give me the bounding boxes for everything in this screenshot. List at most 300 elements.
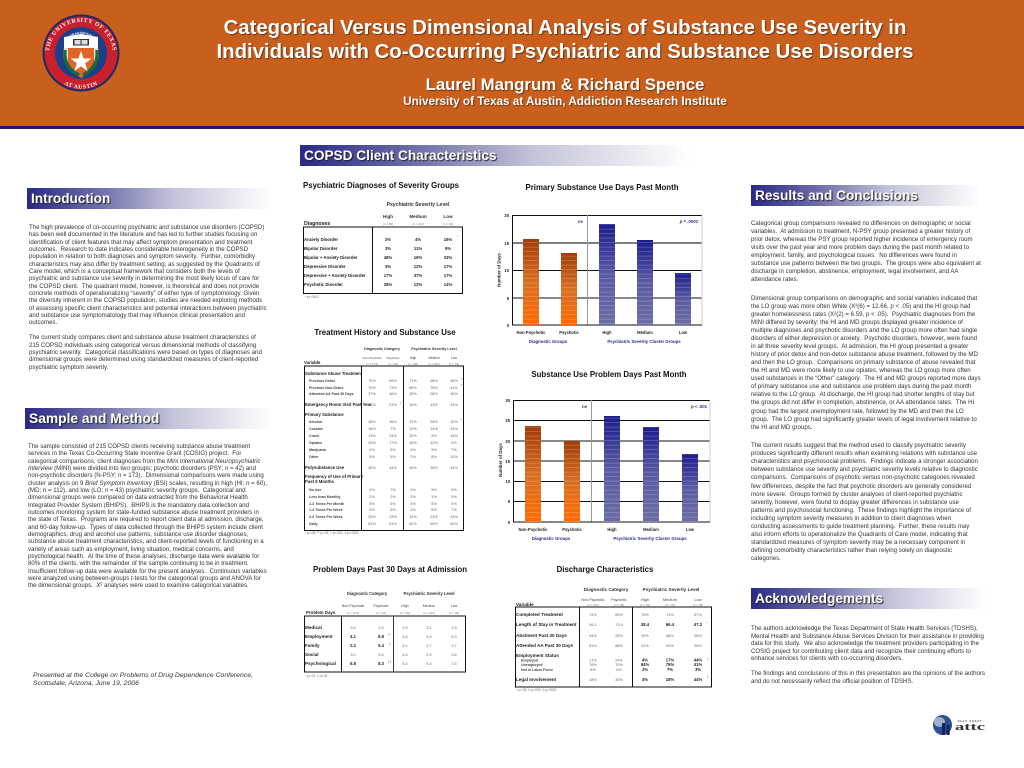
table: discharge characteristics: 47.2 xyxy=(694,622,703,627)
table: discharge characteristics: Not in Labor Force xyxy=(521,668,553,672)
bar chart: primary substance use days past month: Psychiatric Severity Cluster Groups xyxy=(607,339,681,344)
table: problem days past 30 days at admission: High xyxy=(401,604,409,608)
text: acknowledgement paragraphs: enhance services for clients with co-occurring disorders. xyxy=(751,655,903,662)
table: discharge characteristics: (n = 117) xyxy=(587,603,599,607)
axis labels: Non-Psychotic xyxy=(516,330,546,335)
table: treatment history and substance use: 45% xyxy=(409,466,417,470)
bar chart: primary substance use days past month xyxy=(496,183,702,344)
table: treatment history and substance use: High xyxy=(410,356,417,360)
table: treatment history and substance use: 42% xyxy=(450,522,458,526)
axis labels: Low xyxy=(679,330,688,335)
text: acknowledgement paragraphs: The authors acknowledge the Texas Department of State Health Services (TDSHS), xyxy=(751,625,978,632)
text: results paragraphs: few differences, despite the fact that psychotic disorders are generally considered xyxy=(751,482,971,490)
table: treatment history and substance use: 14% xyxy=(430,427,438,431)
table: discharge characteristics: 95% xyxy=(694,634,702,638)
table: discharge characteristics: 17% xyxy=(589,658,597,662)
table: treatment history and substance use: 23% xyxy=(430,515,438,519)
text: results paragraphs: disorders of either depression or anxiety. Psychotic disorders, however, were found xyxy=(751,335,977,342)
table: treatment history and substance use: 5% xyxy=(369,455,375,459)
text: results paragraphs: in all three severity level groups. At admission, the HI group presented a greater xyxy=(751,343,968,350)
chart title: Primary Substance Use Days Past Month xyxy=(525,183,679,192)
table: discharge characteristics: 38.4 xyxy=(641,622,650,627)
table: treatment history and substance use: † xyxy=(461,383,463,387)
table: discharge characteristics: 4% xyxy=(642,677,648,682)
table: psychiatric diagnoses of severity groups: 3% xyxy=(385,246,391,251)
text: results paragraphs: greater homelessness rates (X²(2) = 6.59, p < .05). Psychiatric diagnoses from the xyxy=(751,311,975,318)
table: problem days past 30 days at admission: Diagnostic Category xyxy=(347,591,388,596)
table: psychiatric diagnoses of severity groups: 37% xyxy=(414,273,422,278)
bar chart: primary substance use days past month: p = .0001 xyxy=(679,219,699,224)
table: treatment history and substance use: 2-6 Times Per Week xyxy=(309,515,343,519)
table: problem days past 30 days at admission: ** xyxy=(388,633,391,637)
table: discharge characteristics: 74% xyxy=(589,613,597,617)
table: discharge characteristics: 8% xyxy=(590,668,596,672)
table: discharge characteristics: Completed Treatment xyxy=(516,612,563,617)
table: psychiatric diagnoses of severity groups: 48% xyxy=(384,255,392,260)
table: problem days past 30 days at admission: 5.6 xyxy=(378,653,384,657)
table: discharge characteristics: 76% xyxy=(589,663,597,667)
table: treatment history and substance use: 36% xyxy=(389,420,397,424)
text: sample and method paragraph: categorical comparisons, client diagnoses from the Mini International Neuropsychiatric xyxy=(28,458,261,465)
table: discharge characteristics: Psychotic xyxy=(611,598,627,602)
axis labels: 5 xyxy=(507,296,510,301)
text: introduction paragraphs: the COPSD client. The quadrant model, however, is theoretical and does not provide xyxy=(29,283,259,290)
table: discharge characteristics: 7% xyxy=(667,667,673,672)
axis labels: 30 xyxy=(505,398,511,403)
table: treatment history and substance use: 13% xyxy=(368,434,376,438)
heading: Acknowledgements: Acknowledgements xyxy=(755,591,883,606)
table: problem days past 30 days at admission: (n = 43) xyxy=(449,611,459,615)
table: treatment history and substance use: 2% xyxy=(390,495,396,499)
text: introduction paragraphs: the diversity inherent in the COPSD population, studies are needed exploring methods xyxy=(29,297,262,304)
table: treatment history and substance use: 6% xyxy=(431,508,437,512)
text: introduction paragraphs: characteristics may also differ by treatment setting, as suggested by the Quadrants of xyxy=(29,261,260,268)
table: problem days past 30 days at admission: Psychological xyxy=(305,661,336,666)
table: treatment history and substance use: 5% xyxy=(369,502,375,506)
table: psychiatric diagnoses of severity groups: * xyxy=(457,235,459,239)
table: discharge characteristics: 18% xyxy=(666,677,674,682)
table: discharge characteristics: 88% xyxy=(666,634,674,638)
table: problem days past 30 days at admission xyxy=(304,565,467,678)
table: problem days past 30 days at admission: 4.1 xyxy=(350,634,357,639)
text: sample and method paragraph: dimensional groups were compared on data extracted from the Behavioral Health xyxy=(28,494,248,501)
table: treatment history and substance use: 1% xyxy=(431,495,437,499)
table: treatment history and substance use: Opiates xyxy=(309,441,322,445)
table: treatment history and substance use: 32% xyxy=(409,403,417,407)
text: sample and method paragraph: Insufficient follow-up data were available for the present analyses. Continuous variables xyxy=(28,568,267,575)
section heading: COPSD Client Characteristics: COPSD Client Characteristics xyxy=(304,148,497,163)
table: discharge characteristics: 91% xyxy=(641,644,649,648)
table: problem days past 30 days at admission: 3.9 xyxy=(378,626,384,630)
table: problem days past 30 days at admission: †† xyxy=(388,660,392,664)
table: treatment history and substance use: 10% xyxy=(450,455,458,459)
icon: university seal xyxy=(42,14,120,92)
table: problem days past 30 days at admission: 8.8 xyxy=(378,634,385,639)
text: sample and method paragraph: variety of areas such as employment, living situation, medical concerns, and xyxy=(28,546,234,553)
table: treatment history and substance use: 19% xyxy=(450,434,458,438)
table: psychiatric diagnoses of severity groups: Depressive + Anxiety Disorder xyxy=(304,273,366,278)
table: treatment history and substance use: Non-Psychotic xyxy=(362,356,382,360)
table: discharge characteristics: Low xyxy=(694,597,702,602)
table: discharge characteristics: Variable xyxy=(516,602,534,607)
text: introduction paragraphs: and substance use symptomatology that may influence clinical presentation and xyxy=(29,312,245,319)
table: treatment history and substance use: Medium xyxy=(428,356,440,360)
table: psychiatric diagnoses of severity groups: 14% xyxy=(444,282,452,287)
table: treatment history and substance use: No Use xyxy=(309,488,321,492)
text: introduction paragraphs: population in relation to both diagnoses and symptom severity. Further, comorbidity xyxy=(29,253,255,260)
text: results paragraphs: group had the largest unemployment rate, followed by the MD and then the LO xyxy=(751,408,964,415)
table: treatment history and substance use: 3% xyxy=(410,502,416,506)
text: results paragraphs: Dimensional group comparisons on demographic and social variables indicated that xyxy=(751,295,977,302)
table: treatment history and substance use: 2% xyxy=(410,488,416,492)
text: results paragraphs: employment, family, and psychological issues. No differences were found in xyxy=(751,252,957,259)
table: psychiatric diagnoses of severity groups xyxy=(303,181,463,299)
table: treatment history and substance use: 26% xyxy=(368,403,376,407)
text: sample and method paragraph: the state of Texas. Programs are required to report client data at admission, discharge, xyxy=(28,516,264,523)
text: results paragraphs: produces significantly different results when examining relations with substance use xyxy=(751,450,977,457)
table: treatment history and substance use: Crack xyxy=(309,434,319,438)
table title: Discharge Characteristics xyxy=(557,565,654,574)
table: treatment history and substance use xyxy=(304,328,464,535)
table: treatment history and substance use: 43% xyxy=(430,403,438,407)
table: discharge characteristics: 3% xyxy=(695,667,701,672)
text: results paragraphs: between substance use severity and psychiatric severity levels relative to diagnostic xyxy=(751,466,978,473)
table: psychiatric diagnoses of severity groups: 17% xyxy=(384,273,392,278)
table: treatment history and substance use: 5% xyxy=(390,502,396,506)
text: results paragraphs: including symptom severity measures in addition to client diagnoses when xyxy=(751,515,951,522)
table: treatment history and substance use: Polysubstance Use xyxy=(305,465,345,470)
text: results paragraphs: history of prior detox and non-detox substance abuse treatment, followed by the MD xyxy=(751,351,978,358)
table: discharge characteristics: Abstinent Past 30 Days xyxy=(516,633,567,638)
table: treatment history and substance use: 24% xyxy=(389,434,397,438)
chart title: Substance Use Problem Days Past Month xyxy=(531,370,687,379)
panel: introduction xyxy=(27,188,267,371)
table: treatment history and substance use: 77% xyxy=(409,379,417,383)
panel: results and conclusions xyxy=(751,185,981,562)
table: discharge characteristics: Legal Involvement xyxy=(516,677,557,682)
table: treatment history and substance use: Past 6 Months xyxy=(305,479,335,484)
text: results paragraphs: conducting assessments to guide treatment planning. Further, these results may xyxy=(751,523,969,530)
text: introduction paragraphs: concrete methods of operationalizing “severity” of either type of symptomology. Given xyxy=(29,290,259,297)
table: problem days past 30 days at admission: Problem Days xyxy=(306,610,336,615)
text: results paragraphs: relative to the LO group. At discharge, the HI group had shorter lengths of stay but xyxy=(751,391,974,398)
table: discharge characteristics: (n = 26) xyxy=(614,603,624,607)
table: problem days past 30 days at admission: 3.1 xyxy=(426,626,432,630)
bar chart: substance use problem days past month xyxy=(498,370,710,541)
table: discharge characteristics: 68% xyxy=(615,644,623,648)
table: psychiatric diagnoses of severity groups: 17% xyxy=(444,273,452,278)
axis labels: Non-Psychotic xyxy=(518,527,548,532)
text: introduction paragraphs: outcomes. xyxy=(29,319,57,326)
text: results paragraphs: The current results suggest that the method used to classify psychiatric severity xyxy=(751,442,966,449)
table: treatment history and substance use: 5% xyxy=(451,441,457,445)
text: sample and method paragraph: demographics, drug and alcohol use patterns, substance use disorder diagnoses, xyxy=(28,531,248,538)
axis labels: 0 xyxy=(508,520,511,525)
table: treatment history and substance use: Low xyxy=(451,356,458,360)
bars xyxy=(525,416,698,522)
text: introduction paragraphs: of assessing specific client characteristics and potential interactions between psychiatric xyxy=(29,305,267,312)
table: discharge characteristics: * xyxy=(706,621,708,625)
text: introduction paragraphs: 215 COPSD individuals using categorical versus dimensional methods of classifying xyxy=(29,342,256,348)
text: results paragraphs: categories. xyxy=(751,555,781,562)
table: psychiatric diagnoses of severity groups: 3% xyxy=(385,264,391,269)
table: discharge characteristics: 75% xyxy=(641,613,649,617)
table: treatment history and substance use: 25% xyxy=(368,515,376,519)
text: results paragraphs: the groups did not differ in completion, abstinence, or AA attendance rates. The HI xyxy=(751,399,974,406)
table: problem days past 30 days at admission: Psychotic xyxy=(374,604,389,608)
heading: Acknowledgements xyxy=(751,588,986,609)
text: results paragraphs: attendance rates. xyxy=(751,276,798,283)
heading: Introduction: Introduction xyxy=(31,191,110,206)
table: problem days past 30 days at admission: (n = 173) xyxy=(347,611,359,615)
text: acknowledgement paragraphs: COSIG project for contributing client data and recognize their continuing efforts to xyxy=(751,648,971,654)
text: introduction paragraphs: The current study compares client and substance abuse treatment characteristics of xyxy=(29,334,256,341)
table: psychiatric diagnoses of severity groups: Diagnoses xyxy=(304,221,330,227)
text: results paragraphs: discharge in completion, abstinence, employment, legal involvement, and AA xyxy=(751,268,958,275)
table: treatment history and substance use: 8% xyxy=(431,455,437,459)
axis labels: Number of Days xyxy=(496,253,502,287)
table: treatment history and substance use: 34% xyxy=(450,427,458,431)
table: treatment history and substance use: 61% xyxy=(368,522,376,526)
table: problem days past 30 days at admission: 8.3 xyxy=(378,661,385,666)
table: treatment history and substance use: 79% xyxy=(368,379,376,383)
bar chart: substance use problem days past month: p < .001 xyxy=(691,404,708,409)
axis labels: 5 xyxy=(508,499,511,504)
table: treatment history and substance use: 17% xyxy=(389,441,397,445)
table: discharge characteristics: 81% xyxy=(589,644,597,648)
table: discharge characteristics: 94% xyxy=(589,634,597,638)
axis labels: High xyxy=(602,330,612,335)
authors: Laurel Mangrum & Richard Spence xyxy=(426,75,704,94)
text: introduction paragraphs: has been well documented in the literature and has led to further studies focusing on xyxy=(29,231,257,238)
table: problem days past 30 days at admission: Family xyxy=(305,643,320,648)
table: problem days past 30 days at admission: 3.5 xyxy=(350,626,356,630)
table: discharge characteristics: 17% xyxy=(666,658,674,662)
table: discharge characteristics: 2% xyxy=(642,667,648,672)
table: treatment history and substance use: 2% xyxy=(369,495,375,499)
table: problem days past 30 days at admission: Employment xyxy=(305,634,333,639)
table: problem days past 30 days at admission: 3.6 xyxy=(451,653,457,657)
table: treatment history and substance use: 33% xyxy=(450,515,458,519)
table: problem days past 30 days at admission: 5.1 xyxy=(402,644,408,648)
table: problem days past 30 days at admission: 6.8 xyxy=(350,661,357,666)
text: introduction paragraphs: psychiatric and substance use severity in determining the most likely locus of care for xyxy=(29,275,259,282)
text: acknowledgement paragraphs xyxy=(751,625,985,684)
table: psychiatric diagnoses of severity groups: 16% xyxy=(444,237,452,242)
text: sample and method paragraph: outcomes monitoring system for state-funded substance abuse treatment providers in xyxy=(28,509,259,516)
table: treatment history and substance use: 5% xyxy=(451,488,457,492)
table: psychiatric diagnoses of severity groups: Bipolar + Anxiety Disorder xyxy=(304,255,358,260)
table: psychiatric diagnoses of severity groups: (n = 43) xyxy=(443,222,453,226)
text: introduction paragraphs xyxy=(29,224,267,371)
table: treatment history and substance use: Other xyxy=(309,455,319,459)
table: treatment history and substance use: 5% xyxy=(390,455,396,459)
table: problem days past 30 days at admission: Non-Psychotic xyxy=(342,604,365,608)
axis labels xyxy=(496,213,688,335)
table title: Psychiatric Diagnoses of Severity Groups xyxy=(303,181,460,190)
table: problem days past 30 days at admission: (n = 42) xyxy=(376,611,386,615)
table: treatment history and substance use: 69% xyxy=(389,379,397,383)
table: treatment history and substance use: 45% xyxy=(368,466,376,470)
table: treatment history and substance use: 12% xyxy=(409,427,417,431)
table: treatment history and substance use: 76% xyxy=(430,386,438,390)
text: sample and method paragraph: The sample consisted of 215 COPSD clients receiving substance abuse treatment xyxy=(28,443,250,450)
table: treatment history and substance use: 5% xyxy=(390,508,396,512)
table: treatment history and substance use: 32% xyxy=(450,420,458,424)
text: results paragraphs: the HI and MD groups. xyxy=(751,424,812,431)
text: results paragraphs: prior detox, whereas the PSY group reported higher incidence of emergency room xyxy=(751,236,973,243)
text: results paragraphs: characteristics and psychosocial problems. Findings indicate a stronger association xyxy=(751,458,978,465)
axis labels: 15 xyxy=(504,241,510,246)
table: treatment history and substance use: Attended AA Past 30 Days xyxy=(309,392,354,396)
table: treatment history and substance use: 5% xyxy=(451,502,457,506)
table: problem days past 30 days at admission: 2.2 xyxy=(350,643,357,648)
axis labels: 25 xyxy=(505,418,511,423)
axis labels: 10 xyxy=(505,479,511,484)
text: introduction paragraphs: Care model, which is a conceptual framework that considers both the levels of xyxy=(29,268,240,275)
table: discharge characteristics: 69% xyxy=(615,613,623,617)
text: conference note xyxy=(33,672,253,687)
table: treatment history and substance use: 2% xyxy=(410,455,416,459)
table: problem days past 30 days at admission: Medium xyxy=(423,604,435,608)
table: treatment history and substance use: † xyxy=(461,377,463,381)
table: discharge characteristics: Employed xyxy=(521,658,538,662)
table: psychiatric diagnoses of severity groups: (n = 60) xyxy=(383,222,393,226)
text: conference note: Scottsdale, Arizona, June 19, 2006 xyxy=(33,680,139,687)
section heading: COPSD Client Characteristics xyxy=(300,145,690,166)
text: results paragraphs: more severe. Groups formed by cluster analyses of client-reported psychiatric xyxy=(751,491,963,498)
table: psychiatric diagnoses of severity groups: Anxiety Disorder xyxy=(304,237,338,242)
text: acknowledgement paragraphs: The findings and conclusions of this in this presentation are the opinions of the authors xyxy=(751,670,985,677)
text: introduction paragraphs: identification of client features that may affect symptom presentation and treatment xyxy=(29,239,252,246)
table: treatment history and substance use: 1-3 Times Per Week xyxy=(309,508,343,512)
table: discharge characteristics: 30% xyxy=(615,678,623,682)
table: treatment history and substance use: 32% xyxy=(409,434,417,438)
table: discharge characteristics xyxy=(515,565,712,692)
axis labels: Medium xyxy=(637,330,653,335)
text: sample and method paragraph xyxy=(28,443,267,589)
text: sample and method paragraph: were analyzed using between-groups t-tests for the categorical groups and ANOVA for xyxy=(28,575,261,582)
table: treatment history and substance use: 36% xyxy=(450,392,458,396)
panel: sample and method xyxy=(25,408,267,589)
table: discharge characteristics: 41% xyxy=(694,662,702,667)
table: problem days past 30 days at admission: † xyxy=(389,642,391,646)
table: treatment history and substance use: 7% xyxy=(451,448,457,452)
table: treatment history and substance use: 1-3 Times Per Month xyxy=(309,502,344,506)
bar chart: substance use problem days past month: Diagnostic Groups xyxy=(532,536,571,541)
table: treatment history and substance use: 41% xyxy=(450,386,458,390)
text: results paragraphs: visits over the past year and more problem days during the past month related to xyxy=(751,244,969,251)
icon: university seal: THE UNIVERSITY OF TEXAS xyxy=(45,18,116,51)
table: discharge characteristics: 70% xyxy=(615,663,623,667)
table: treatment history and substance use: Daily xyxy=(309,522,318,526)
table: treatment history and substance use: (n = 42) xyxy=(388,362,398,366)
table: problem days past 30 days at admission: 7.6 xyxy=(451,662,457,666)
table: treatment history and substance use: 2% xyxy=(410,495,416,499)
table: treatment history and substance use: 39% xyxy=(409,392,417,396)
text: results paragraphs: standardized measures of symptom severity may be a necessary component in xyxy=(751,539,965,546)
table: treatment history and substance use: 36% xyxy=(389,392,397,396)
table: problem days past 30 days at admission: 4.5 xyxy=(426,635,432,639)
table: treatment history and substance use: (n = 173) xyxy=(366,362,378,366)
table: treatment history and substance use: 33% xyxy=(368,441,376,445)
table: psychiatric diagnoses of severity groups: 17% xyxy=(444,264,452,269)
table title: Problem Days Past 30 Days at Admission xyxy=(313,565,467,574)
table: discharge characteristics: (n = 46) xyxy=(640,603,650,607)
table: problem days past 30 days at admission: Low xyxy=(451,604,458,608)
axis labels: Low xyxy=(686,527,695,532)
table: treatment history and substance use: 76% xyxy=(368,386,376,390)
table: treatment history and substance use: 44% xyxy=(389,466,397,470)
table: discharge characteristics: 82% xyxy=(666,644,674,648)
table: treatment history and substance use: 5% xyxy=(431,502,437,506)
axis labels: Psychotic xyxy=(562,527,582,532)
table: psychiatric diagnoses of severity groups: * p<.0001 xyxy=(305,295,319,299)
table: problem days past 30 days at admission: 3.3 xyxy=(451,626,457,630)
table: treatment history and substance use: 46% xyxy=(450,379,458,383)
table: discharge characteristics: 44% xyxy=(694,658,702,662)
table: discharge characteristics: 66.4 xyxy=(666,622,675,627)
table: psychiatric diagnoses of severity groups: 33% xyxy=(444,255,452,260)
table: treatment history and substance use: 28% xyxy=(409,441,417,445)
text: introduction paragraphs: psychiatric symptom severity. xyxy=(29,364,108,371)
table: discharge characteristics: Medium xyxy=(663,597,678,602)
table: psychiatric diagnoses of severity groups: 9% xyxy=(445,246,451,251)
table: problem days past 30 days at admission: Medical xyxy=(305,625,322,630)
table: treatment history and substance use: 28% xyxy=(430,392,438,396)
table: discharge characteristics: 4% xyxy=(642,658,648,662)
text: results paragraphs: also inform efforts to operationalize the Quadrants of Care model, indicating that xyxy=(751,531,968,538)
table: discharge characteristics: (n = 76) xyxy=(665,603,675,607)
bar chart: substance use problem days past month: Psychiatric Severity Cluster Groups xyxy=(613,536,687,541)
table: treatment history and substance use: Emergency Room Visit Past Year xyxy=(305,402,372,407)
text: introduction paragraphs: psychiatric severity. Categorical classifications were based on types of diagnoses and xyxy=(29,349,262,356)
table: problem days past 30 days at admission: Psychiatric Severity Level xyxy=(403,591,455,596)
table: psychiatric diagnoses of severity groups: Depressive Disorder xyxy=(304,264,346,269)
bars xyxy=(523,224,691,325)
text: sample and method paragraph: psychological health. At the time of these analyses, discharge data were available for xyxy=(28,553,259,560)
table: discharge characteristics: † xyxy=(707,657,709,661)
table: discharge characteristics: 67% xyxy=(694,613,702,617)
text: sample and method paragraph: Interview (MINI) were divided into two groups; psychotic disorders (PSY; n = 42) and xyxy=(28,465,256,472)
text: results paragraphs: Categorical group comparisons revealed no differences on demographic or social xyxy=(751,220,971,227)
text: results paragraphs: used substances in the “Other” category. The HI and MD groups reported more days xyxy=(751,375,981,382)
table: treatment history and substance use: Less than Monthly xyxy=(309,495,341,499)
axis labels: 10 xyxy=(504,268,510,273)
table: psychiatric diagnoses of severity groups: Medium xyxy=(409,214,427,219)
icon: ATTC logo xyxy=(933,715,985,735)
text: sample and method paragraph: (MD; n = 112), and low (LO; n = 43) psychiatric severity groups. Categorical and xyxy=(28,487,246,494)
table: discharge characteristics: Unemployed xyxy=(521,663,543,667)
text: acknowledgement paragraphs: data for this study. We also acknowledge the treatment providers participating in the xyxy=(751,640,979,647)
table: treatment history and substance use: 86% xyxy=(409,386,417,390)
heading: Introduction xyxy=(27,188,272,209)
axis labels xyxy=(498,398,695,532)
table: problem days past 30 days at admission: 2.9 xyxy=(426,653,432,657)
text: sample and method paragraph: Integrated Provider System (BHIPS). BHIPS is the mandatory data collection and xyxy=(28,502,249,509)
table: problem days past 30 days at admission: Social xyxy=(305,652,319,657)
table: discharge characteristics: Employment Status xyxy=(516,653,559,658)
table: discharge characteristics: 6% xyxy=(616,668,622,672)
heading: Sample and Method: Sample and Method xyxy=(29,411,159,426)
affiliation: University of Texas at Austin, Addiction Research Institute xyxy=(403,95,727,108)
table: discharge characteristics: * p<.05; † p<.001; ‡ p<.0001 xyxy=(516,688,557,692)
table: discharge characteristics: 56.1 xyxy=(589,623,597,627)
table title: Treatment History and Substance Use xyxy=(314,328,456,337)
table: treatment history and substance use: * p<.05; ** p<.01; † p<.001; ‡ p<.0001 xyxy=(305,531,359,535)
table: treatment history and substance use: 9% xyxy=(431,448,437,452)
table: treatment history and substance use: (n = 60) xyxy=(408,362,418,366)
